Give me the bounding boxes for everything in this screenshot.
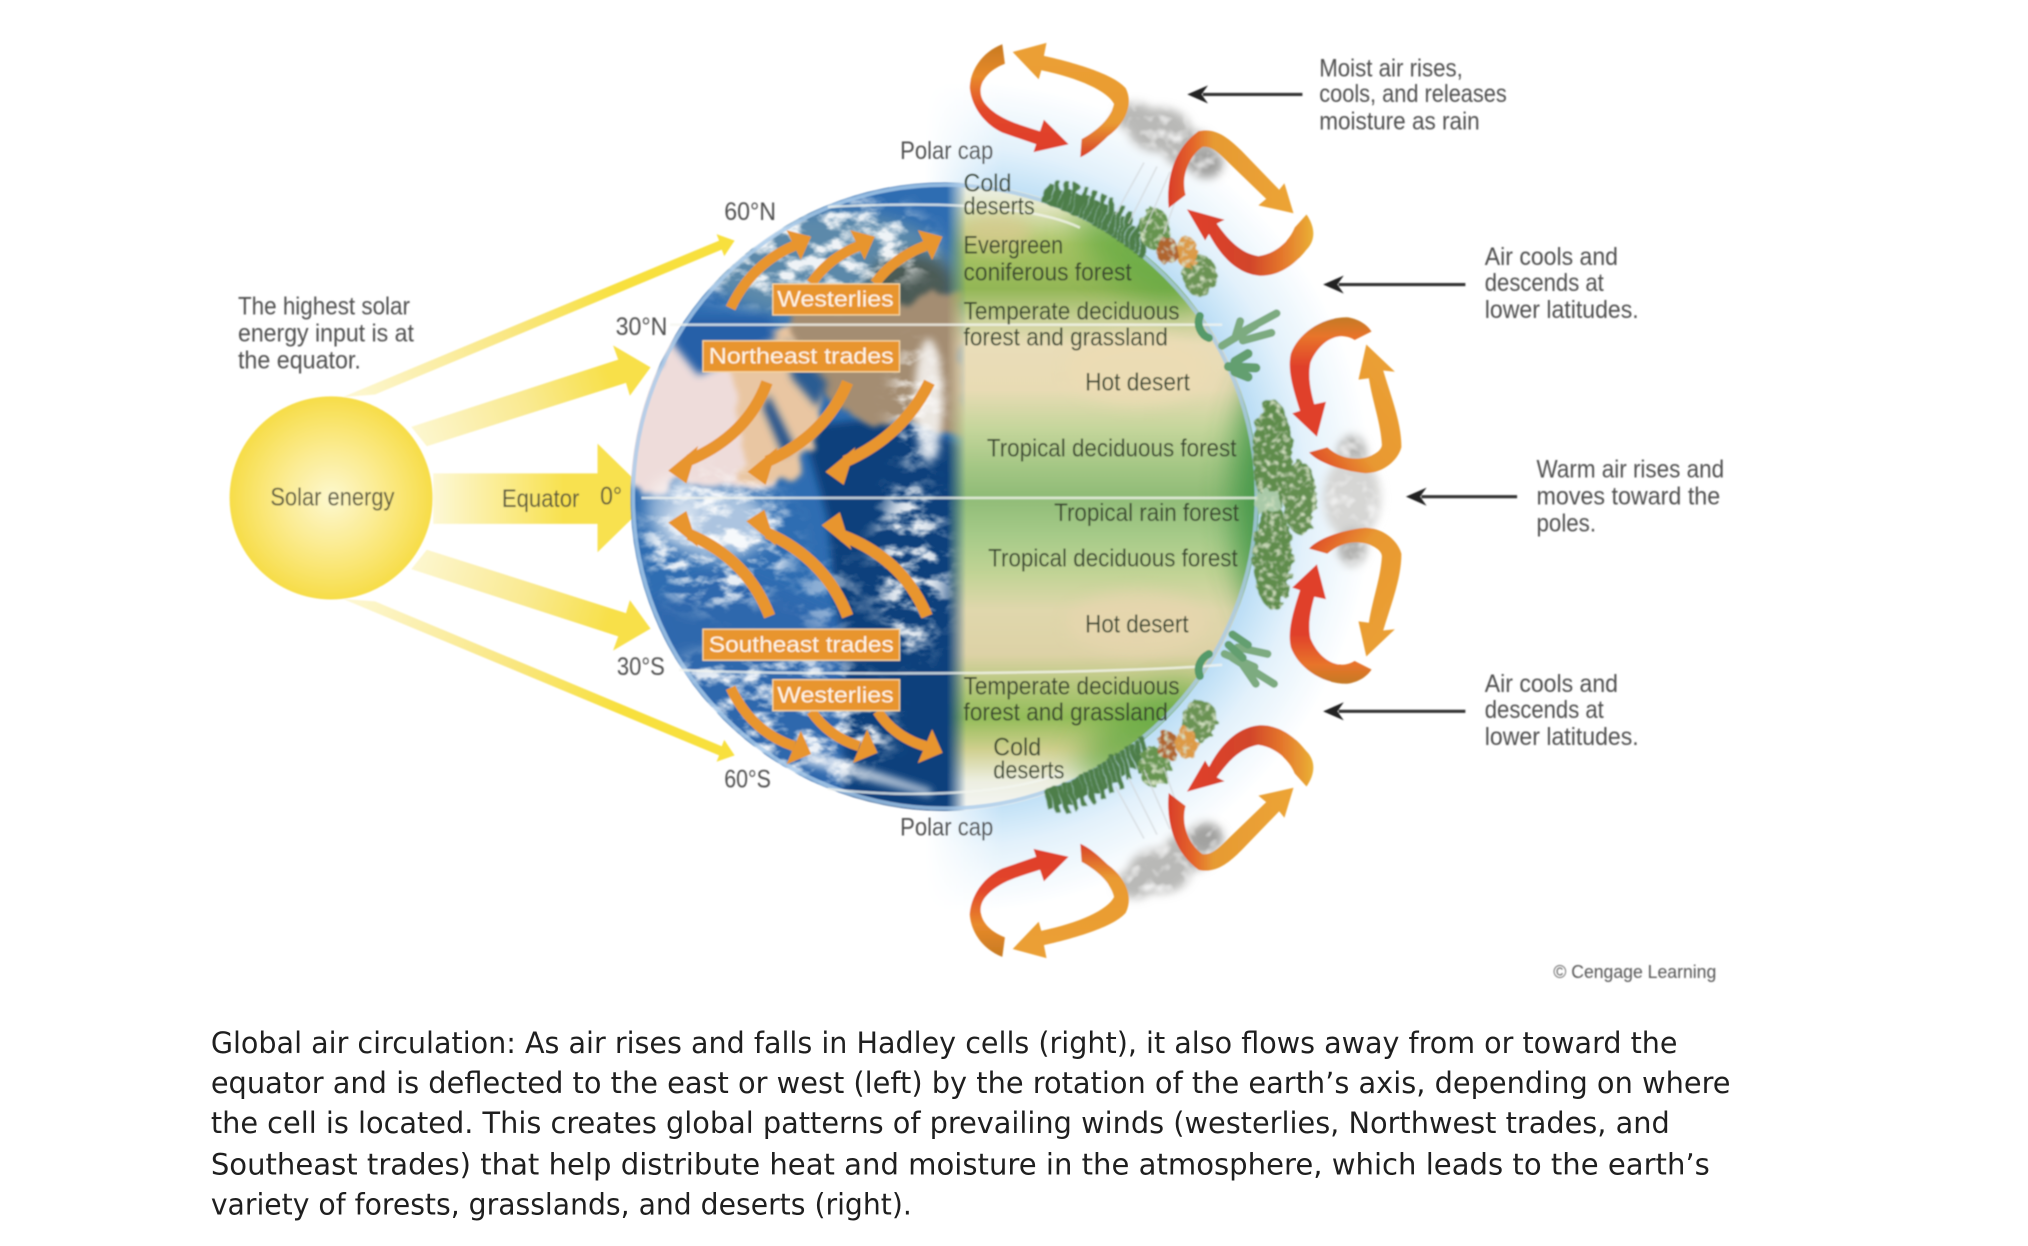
biome labels: deserts xyxy=(993,758,1064,785)
sun and equator labels: Equator xyxy=(502,486,579,513)
arrows: southeast trades xyxy=(668,510,927,616)
tropical forest trees xyxy=(1253,400,1317,608)
deciduous trees south xyxy=(1139,699,1217,788)
ribbon: polar cell north xyxy=(970,43,1129,157)
biome labels: Temperate deciduous xyxy=(964,674,1180,701)
ribbon: polar cell south xyxy=(970,844,1129,958)
callout: air cools north xyxy=(1323,244,1639,324)
globe biome half xyxy=(948,184,1260,810)
arrow: ray to 30S xyxy=(411,550,651,651)
label: Westerlies south: Westerlies xyxy=(777,682,894,707)
scaled vegetation, cloud and arrow artwork xyxy=(668,43,1401,958)
atmosphere halo xyxy=(932,80,1372,914)
icon: sun xyxy=(230,396,433,599)
solar energy rays xyxy=(343,234,735,762)
biome labels: forest and grassland xyxy=(964,324,1168,351)
biome labels: coniferous forest xyxy=(964,260,1132,287)
callout: air cools north: Air cools and xyxy=(1485,244,1618,271)
Hadley cell ribbons xyxy=(970,43,1401,958)
callout: moist air rises: cools, and releases xyxy=(1319,81,1507,108)
arrow: ray to equator xyxy=(433,444,653,552)
wind labels xyxy=(703,284,900,711)
figure: global air circulation xyxy=(212,42,1729,1220)
biome labels: Tropical deciduous forest xyxy=(988,546,1238,573)
cloud: equatorial column xyxy=(1323,436,1381,566)
polar vegetation: conifers south xyxy=(1045,736,1147,812)
callout: air cools north: descends at xyxy=(1485,270,1604,297)
caption xyxy=(211,1026,1731,1221)
label: Westerlies north xyxy=(773,284,900,315)
biome labels: Tropical rain forest xyxy=(1054,500,1239,527)
prevailing wind arrows xyxy=(668,230,943,764)
caption: Southeast trades) that help distribute heat and moisture in the atmosphere, which leads to the earth’s xyxy=(211,1147,1710,1181)
latitude lines xyxy=(642,205,1257,794)
text: solar input note xyxy=(238,293,414,375)
rain south xyxy=(1115,767,1183,839)
caption: equator and is deflected to the east or west (left) by the rotation of the earth’s axis, depending on where xyxy=(211,1066,1731,1100)
biome labels: Evergreen xyxy=(964,233,1063,260)
text: solar input note: The highest solar xyxy=(238,293,410,320)
callout: air cools north: lower latitudes. xyxy=(1485,297,1639,324)
polar vegetation: conifers north xyxy=(1045,181,1147,257)
ribbon: mid-latitude cell south xyxy=(1168,725,1313,871)
label: Westerlies south xyxy=(773,680,900,711)
deciduous trees north xyxy=(1139,208,1217,296)
credit: © Cengage Learning xyxy=(1553,962,1716,982)
text: solar input note: energy input is at xyxy=(238,320,414,347)
ribbon: Hadley cell north xyxy=(1290,317,1401,473)
text: solar input note: the equator. xyxy=(238,348,361,375)
callout: air cools south: descends at xyxy=(1485,697,1604,724)
arrows: northeast trades xyxy=(668,382,930,485)
biome labels: Hot desert xyxy=(1085,611,1189,638)
ribbon: Hadley cell south xyxy=(1290,528,1401,684)
label: Northeast trades xyxy=(703,341,900,372)
callout: moist air rises: Moist air rises, xyxy=(1319,55,1463,82)
clouds and rain xyxy=(1115,103,1381,898)
callout: warm air rises: Warm air rises and xyxy=(1537,456,1724,483)
biome labels: forest and grassland xyxy=(964,699,1168,726)
callout: warm air rises: moves toward the xyxy=(1537,483,1720,510)
callout: air cools south xyxy=(1323,671,1639,751)
sun and equator labels: 0° xyxy=(600,483,622,510)
equatorial clouds xyxy=(647,339,943,797)
biome labels: Hot desert xyxy=(1085,370,1190,397)
arrows: southern westerlies xyxy=(731,688,943,764)
caption: variety of forests, grasslands, and deserts (right). xyxy=(211,1187,912,1221)
label: Westerlies north: Westerlies xyxy=(777,287,894,312)
callout: air cools south: Air cools and xyxy=(1485,671,1618,698)
cloud texture xyxy=(636,196,958,788)
caption: Global air circulation: As air rises and falls in Hadley cells (right), it also flows away from or toward the xyxy=(211,1026,1677,1060)
arrow: ray to 60S xyxy=(343,599,735,762)
label: Northeast trades: Northeast trades xyxy=(709,343,894,368)
biome labels: Cold xyxy=(993,734,1041,761)
callout: air cools south: lower latitudes. xyxy=(1485,724,1639,751)
biome labels: Temperate deciduous xyxy=(964,298,1180,325)
latitude labels: Polar cap xyxy=(900,815,993,842)
caption: the cell is located. This creates global patterns of prevailing winds (westerlies, Northwest trades, and xyxy=(211,1106,1670,1140)
latitude labels: 30°N xyxy=(616,314,667,341)
cacti south xyxy=(1199,634,1274,684)
arrow: ray to 30N xyxy=(411,345,651,446)
land and ocean patches xyxy=(621,211,964,828)
diagram illustration xyxy=(230,43,1724,982)
sun and equator labels: Solar energy xyxy=(270,485,395,512)
cloud: south polar front xyxy=(1115,823,1223,898)
latitude labels xyxy=(616,138,993,842)
cloud: north polar front xyxy=(1115,103,1223,178)
callout: moist air rises xyxy=(1187,55,1507,135)
rain north xyxy=(1115,163,1183,234)
latitude labels: 30°S xyxy=(617,654,665,681)
biome labels xyxy=(964,170,1239,785)
label: Southeast trades: Southeast trades xyxy=(709,632,894,657)
biome labels: deserts xyxy=(964,194,1035,221)
globe earth half xyxy=(621,168,1257,828)
callout: warm air rises: poles. xyxy=(1537,511,1596,538)
latitude labels: 60°S xyxy=(724,767,771,794)
arrow: ray to 60N xyxy=(343,234,735,397)
latitude labels: 60°N xyxy=(724,199,776,226)
latitude labels: Polar cap xyxy=(900,138,993,165)
callout: warm air rises xyxy=(1406,456,1724,538)
biome labels: Tropical deciduous forest xyxy=(987,436,1237,463)
cacti north xyxy=(1199,313,1277,377)
sun and equator labels xyxy=(270,483,622,513)
biome labels: Cold xyxy=(964,170,1011,197)
callout: moist air rises: moisture as rain xyxy=(1319,108,1480,135)
ribbon: mid-latitude cell north xyxy=(1168,130,1313,276)
arrows: northern westerlies xyxy=(731,230,943,308)
